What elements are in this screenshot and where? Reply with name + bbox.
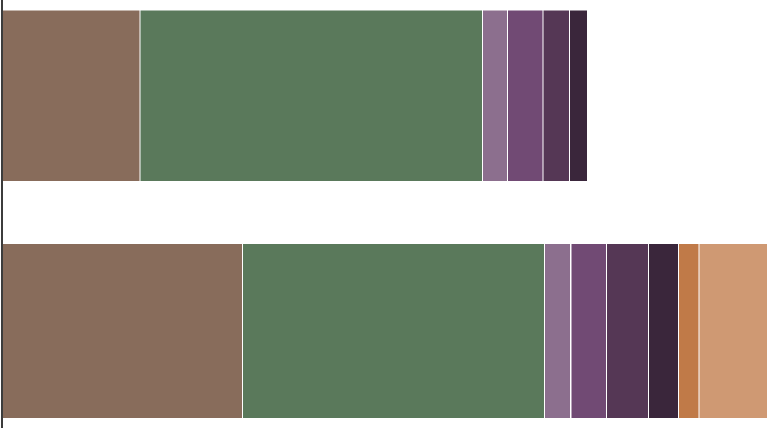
bottom stacked bar xyxy=(2,244,767,418)
top stacked bar xyxy=(2,10,587,181)
vertical axis line xyxy=(1,0,3,428)
